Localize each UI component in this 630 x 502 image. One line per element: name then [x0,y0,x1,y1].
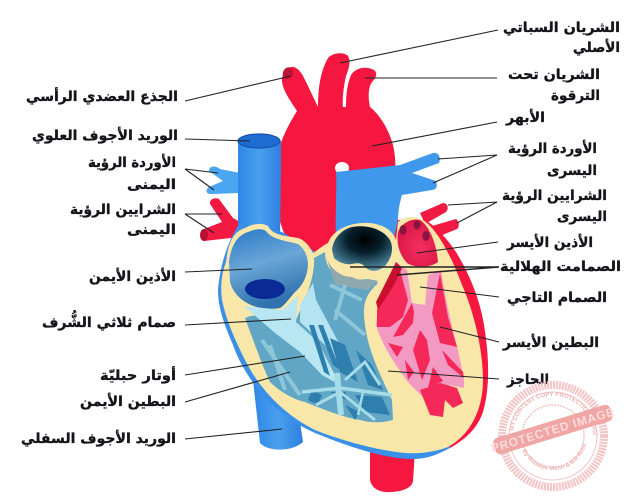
heart wall red [380,220,488,448]
right pulmonary arteries [201,198,240,241]
label: left pulmonary arteries: اليسرى [557,209,607,225]
pulmonary valve chamber [332,226,392,271]
descending aorta [370,445,415,492]
aorta and arch branches [275,53,400,260]
label: right pulmonary arteries: اليمنى [127,222,176,238]
right pulmonary veins [207,167,240,194]
label: chordae tendineae: أوتار حبليّة [100,366,176,384]
brachiocephalic opening [281,65,295,81]
label: left pulmonary veins: الأوردة الرؤية [508,140,597,157]
stamp band: PROTECTED IMAGE [489,404,617,456]
label: tricuspid valve: صمام ثلاثي الشُّرف [42,310,176,331]
left ventricle muscle [377,262,464,417]
left pulmonary artery lower branch [432,219,459,236]
left ventricle [376,263,464,405]
tricuspid valve [244,296,340,385]
superior vena cava [238,141,281,240]
label: left pulmonary arteries: الشرايين الرؤية [502,188,607,204]
label: common carotid artery: الأصلي [573,39,620,56]
label: subclavian artery: الشريان تحت [508,67,600,83]
label: subclavian artery [508,67,600,104]
right atrium opening [245,279,285,299]
aortic arch opening [335,162,349,174]
heart wall blue [218,223,450,459]
label: mitral valve: الصمام التاجي [507,290,607,306]
label: left pulmonary veins [508,140,597,179]
stamp circular text: MY CONTENT COPY PROTECTION PLUGIN [510,392,597,435]
right atrium [229,229,308,309]
right pulmonary artery end [200,229,208,241]
label: right pulmonary veins: الأوردة الرؤية [88,154,176,171]
label: left pulmonary arteries [502,188,607,225]
left pulmonary artery upper branch [420,203,448,224]
label: right pulmonary arteries: الشرايين الرؤية [70,202,176,218]
inferior vena cava [253,380,303,450]
pulmonary valve shadow [326,256,378,290]
label: common carotid artery [503,20,620,56]
dark cavities [308,325,390,420]
right ventricle upper light flap [300,283,355,375]
right ventricle upper light bands [262,285,365,395]
heart diagram [200,53,488,492]
label: right pulmonary arteries [70,202,176,238]
chordae tendineae network [302,362,392,420]
label: right atrium: الأذين الأيمن [89,268,176,285]
stamp rings [502,385,604,487]
label: brachiocephalic trunk: الجذع العضدي الرأسي [26,87,178,106]
label: right pulmonary veins: اليمنى [127,177,176,193]
left atrium [397,220,438,267]
label: common carotid artery: الشريان السباتي [503,20,620,36]
pulmonary artery [336,153,440,240]
label: right ventricle: البطين الأيمن [80,393,176,410]
label: left pulmonary veins: اليسرى [547,163,597,179]
label: septum: الحاجز [506,372,549,388]
label: left ventricle: البطين الأيسر [502,334,599,351]
myocardium [221,217,483,453]
stamp circular text: By Rubaiya Mono & Bill Rose [522,444,586,470]
label: right pulmonary veins [88,154,176,193]
mitral valve dark fold [376,262,402,310]
label: subclavian artery: الترقوة [551,88,600,104]
superior vena cava opening [238,134,280,148]
label: semilunar valves: الصمامت الهلالية [500,259,621,275]
label: inferior vena cava: الوريد الأجوف السفلي [21,430,176,447]
pulmonary vein openings [400,220,430,241]
label: left atrium: الأذين الأيسر [506,234,593,251]
right ventricle chamber [245,252,393,422]
label: superior vena cava: الوريد الأجوف العلوي [32,127,178,145]
leader lines [185,30,499,439]
label: aorta: الأبهر [505,109,545,126]
